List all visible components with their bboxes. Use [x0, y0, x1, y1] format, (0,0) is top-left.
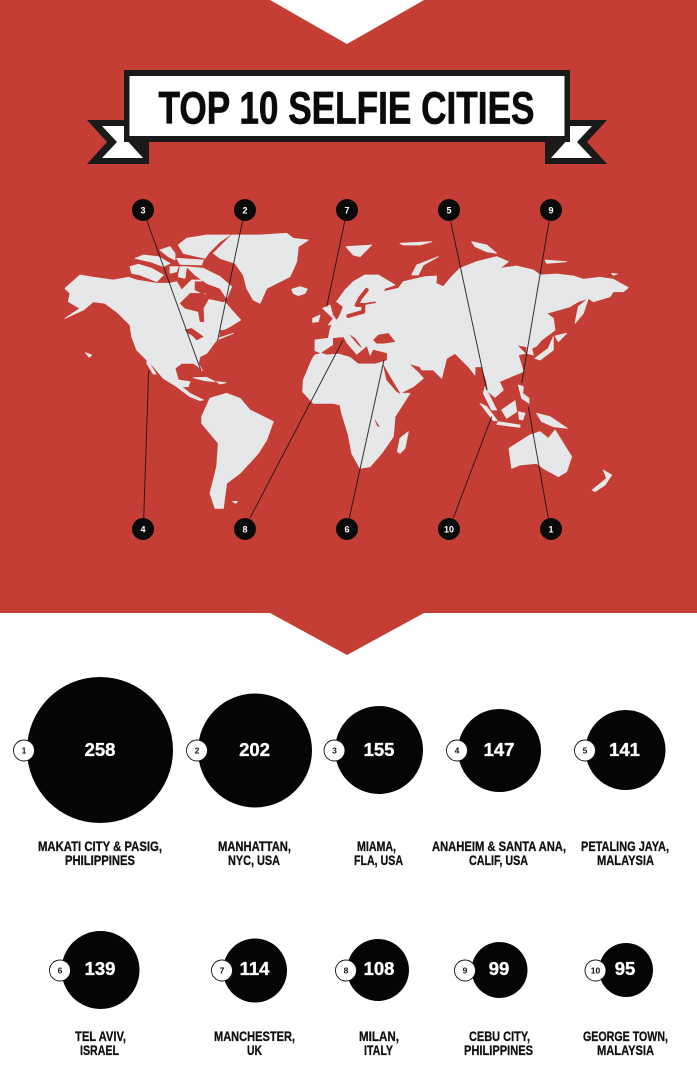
city 6: Tel Aviv: 6	[58, 966, 63, 976]
city 7: Manchester: MANCHESTER,	[214, 1029, 295, 1044]
title ribbon banner	[87, 70, 607, 164]
city 2: Manhattan	[186, 694, 312, 868]
city 4: Anaheim and Santa Ana: ANAHEIM & SANTA ANA,	[432, 839, 566, 854]
city 10: George Town: GEORGE TOWN,	[583, 1029, 668, 1044]
map: Hudson Bay and Great Lakes	[180, 282, 234, 340]
city 6: Tel Aviv: 139	[85, 958, 115, 979]
map number markers: 8	[242, 524, 248, 534]
map number markers: 2	[242, 206, 248, 216]
city 1: Makati City and Pasig	[14, 677, 173, 868]
city 10: George Town: MALAYSIA	[597, 1043, 654, 1058]
map: inland seas	[322, 290, 400, 427]
city 1: Makati City and Pasig: 258	[85, 739, 115, 760]
city 9: Cebu City: 9	[463, 966, 468, 976]
city 8: Milan: 8	[344, 966, 349, 976]
city 1: Makati City and Pasig: 1	[22, 746, 27, 756]
map number markers: 9	[548, 206, 554, 216]
city 4: Anaheim and Santa Ana	[432, 709, 566, 868]
map number markers: 6	[344, 524, 350, 534]
city 8: Milan	[336, 939, 409, 1058]
city 3: Miama: 3	[332, 746, 337, 756]
map number markers: 7	[344, 206, 350, 216]
leader lines	[144, 220, 549, 518]
title: TOP 10 SELFIE CITIES	[158, 82, 534, 134]
map number markers: 1	[548, 524, 554, 534]
world map	[65, 199, 628, 540]
city 3: Miama: MIAMA,	[357, 839, 396, 854]
city 10: George Town: 95	[615, 958, 635, 979]
city 8: Milan: 108	[364, 958, 394, 979]
city 8: Milan: ITALY	[364, 1043, 393, 1058]
city 2: Manhattan: 202	[239, 739, 270, 760]
map number markers: 5	[446, 206, 452, 216]
city 9: Cebu City: CEBU CITY,	[469, 1029, 530, 1044]
city 6: Tel Aviv: TEL AVIV,	[75, 1029, 126, 1044]
map number markers: 10	[444, 524, 454, 534]
city 7: Manchester	[212, 938, 295, 1058]
city 5: Petaling Jaya: 141	[609, 739, 640, 760]
city 7: Manchester: UK	[247, 1043, 262, 1058]
panel: red header background with chevrons	[0, 0, 697, 655]
city 6: Tel Aviv	[50, 931, 140, 1058]
city 3: Miama: FLA, USA	[354, 853, 403, 868]
city 5: Petaling Jaya: PETALING JAYA,	[581, 839, 669, 854]
city 5: Petaling Jaya	[574, 710, 669, 868]
city 4: Anaheim and Santa Ana: 4	[455, 746, 460, 756]
city 2: Manhattan: NYC, USA	[228, 853, 280, 868]
city 1: Makati City and Pasig: MAKATI CITY & PASIG,	[38, 839, 162, 854]
map: Americas and Greenland	[65, 233, 308, 508]
city 1: Makati City and Pasig: PHILIPPINES	[65, 853, 135, 868]
city 5: Petaling Jaya: 5	[583, 746, 588, 756]
city 7: Manchester: 114	[240, 958, 270, 979]
map: Europe, Asia, Africa, Oceania	[303, 242, 628, 492]
city 8: Milan: MILAN,	[359, 1029, 399, 1044]
city 9: Cebu City	[454, 942, 533, 1058]
city 5: Petaling Jaya: MALAYSIA	[597, 853, 654, 868]
city 10: George Town: 10	[591, 966, 600, 976]
map number markers: 3	[140, 206, 146, 216]
city 3: Miama: 155	[364, 739, 394, 760]
city 10: George Town	[583, 943, 668, 1058]
city 7: Manchester: 7	[220, 966, 225, 976]
city 9: Cebu City: PHILIPPINES	[464, 1043, 533, 1058]
map number markers	[132, 199, 562, 540]
city 4: Anaheim and Santa Ana: 147	[484, 739, 514, 760]
city 6: Tel Aviv: ISRAEL	[80, 1043, 119, 1058]
city 2: Manhattan: 2	[195, 746, 200, 756]
city 4: Anaheim and Santa Ana: CALIF, USA	[469, 853, 528, 868]
city 9: Cebu City: 99	[489, 958, 509, 979]
city 2: Manhattan: MANHATTAN,	[218, 839, 291, 854]
map number markers: 4	[140, 524, 146, 534]
city 3: Miama	[324, 706, 423, 868]
